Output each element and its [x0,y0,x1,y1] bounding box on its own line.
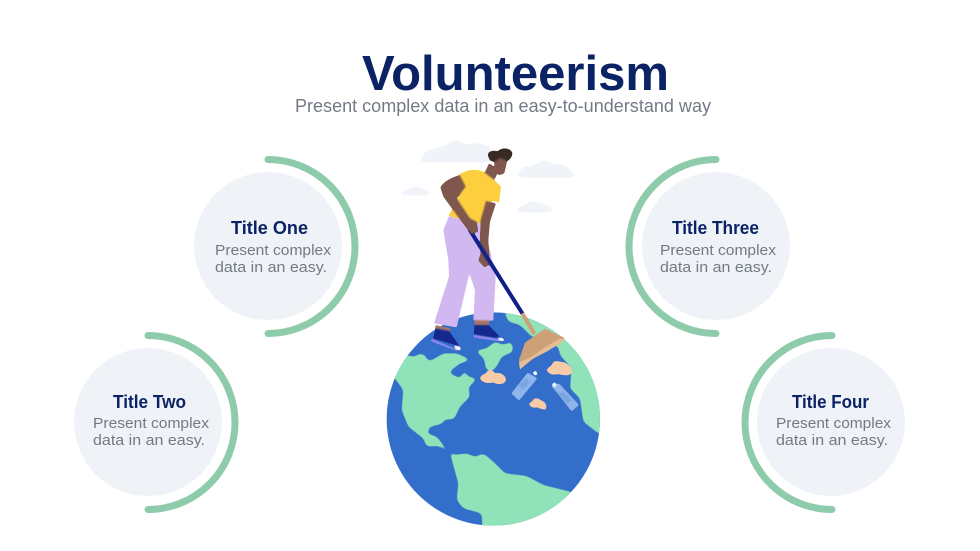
marine litter [480,361,572,409]
head [519,329,565,369]
left shoe [433,328,460,347]
broom handle [469,229,523,315]
text three: Present complex [660,242,777,259]
title: Volunteerism [362,47,669,101]
icon: person sweeping [431,148,523,352]
disc two [74,348,222,496]
icon: broom head [519,313,565,369]
right leg [465,217,496,321]
ankles [435,319,489,333]
disc four [757,348,905,496]
disc three [642,172,790,320]
icon: clouds [399,140,576,212]
right shoe [474,325,502,338]
far arm [478,201,496,267]
plastic bottles [511,371,579,411]
text four: Present complex [776,415,892,432]
disc one [194,172,342,320]
left leg [434,216,469,327]
hair [488,148,512,162]
ring arc one [268,160,355,334]
near arm [440,175,478,234]
ring arc two [148,336,235,510]
legs and shoes [431,216,504,352]
text one: data in an easy. [215,259,327,276]
text two: data in an easy. [93,432,205,449]
panel: Title Four [745,336,905,510]
text four: data in an easy. [776,432,888,449]
heading four: Title Four [792,392,869,412]
ring arc three [629,160,716,334]
subtitle: Present complex data in an easy-to-understand way [295,96,711,116]
icon: globe [386,312,600,526]
text one: Present complex [215,242,332,259]
text three: data in an easy. [660,259,772,276]
panel: Title One [194,160,355,334]
upper body [440,148,523,315]
shirt [448,170,501,223]
neck [484,163,499,181]
heading one: Title One [231,218,308,238]
ring arc four [745,336,832,510]
heading three: Title Three [672,218,759,238]
panel: Title Three [629,160,790,334]
heading two: Title Two [113,392,186,412]
broom stick [522,313,534,334]
ocean [387,312,600,526]
face [493,155,508,175]
continents [394,313,600,526]
text two: Present complex [93,415,210,432]
panel: Title Two [74,336,235,510]
bristles edge [519,338,565,369]
